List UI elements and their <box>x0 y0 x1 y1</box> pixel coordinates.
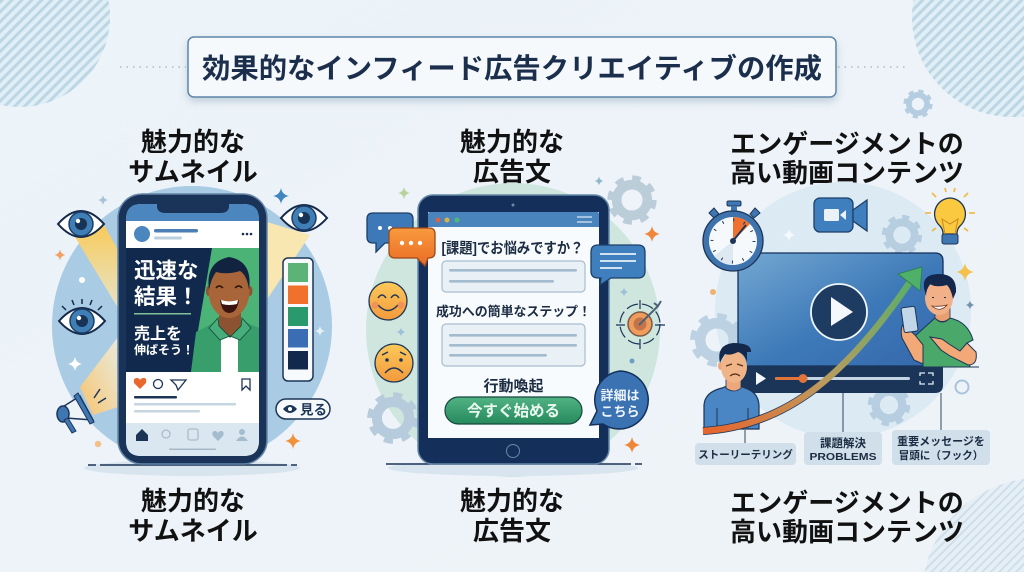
ad creative <box>126 248 259 372</box>
icon: video camera <box>814 198 867 232</box>
icon: megaphone <box>57 389 106 433</box>
sparkles <box>54 188 325 449</box>
label: hook message: 冒頭に（フック） <box>899 449 983 462</box>
label: storytelling <box>695 443 796 465</box>
problem headline: [課題]でお悩みですか？ <box>442 240 584 257</box>
bottom nav <box>126 423 259 456</box>
sad man <box>704 343 759 429</box>
call to action label: 行動喚起 <box>483 377 544 395</box>
post header <box>126 221 259 248</box>
tablet <box>418 195 609 464</box>
eye: middle left <box>59 299 105 334</box>
label: hook message: 重要メッセージを <box>897 434 985 448</box>
CTA button <box>445 397 582 424</box>
heading: thumbnail top: サムネイル <box>128 157 258 187</box>
video player <box>738 253 943 393</box>
callout: details: 詳細は <box>600 388 640 403</box>
label: problem solving: 課題解決 <box>820 436 866 450</box>
sad face <box>375 344 413 382</box>
player controls <box>756 372 933 385</box>
gear: top <box>885 218 919 252</box>
icon: light bulb <box>925 188 975 244</box>
heading: ad copy top: 広告文 <box>473 157 551 187</box>
gear: left <box>694 317 740 363</box>
view pill <box>276 399 330 419</box>
play button <box>811 284 867 340</box>
speech bubble: orange <box>389 228 435 266</box>
smiling man <box>191 257 259 372</box>
eye: top right <box>281 205 327 231</box>
speech bubble: blue left <box>367 213 413 252</box>
notch <box>157 204 229 213</box>
callout: details <box>590 371 648 429</box>
handheld phone <box>901 306 918 333</box>
heading: thumbnail bottom: サムネイル <box>128 516 258 546</box>
gear: bottom left <box>371 396 415 440</box>
heading: video top: 高い動画コンテンツ <box>730 158 964 188</box>
attention beams <box>75 222 310 415</box>
heading: ad copy bottom: 広告文 <box>473 516 551 546</box>
target icon <box>616 300 665 349</box>
icon: stopwatch <box>703 201 763 271</box>
gear near title <box>906 92 930 116</box>
label: storytelling: ストーリーテリング <box>698 448 793 461</box>
panel: ad copy illustration <box>366 176 665 477</box>
gear: top right <box>611 179 653 221</box>
color palette <box>283 258 313 381</box>
heading: thumbnail top: 魅力的な <box>141 127 245 157</box>
heading: video bottom: 高い動画コンテンツ <box>730 517 964 547</box>
heading: video bottom: エンゲージメントの <box>730 488 964 518</box>
ad creative: 迅速な <box>134 259 199 283</box>
gear: bottom <box>871 387 907 423</box>
text box 2 <box>442 324 585 366</box>
growth arrow <box>703 267 922 431</box>
eye: top left <box>58 211 104 237</box>
panel: thumbnail illustration <box>52 186 332 476</box>
heading: thumbnail bottom: 魅力的な <box>141 486 245 516</box>
text box 1 <box>442 261 585 292</box>
label: problem solving: PROBLEMS <box>810 451 876 463</box>
sparkles <box>396 176 660 453</box>
title banner <box>120 37 905 97</box>
panel: video illustration <box>694 182 990 465</box>
heading: ad copy bottom: 魅力的な <box>460 486 564 516</box>
heading: video top: エンゲージメントの <box>730 129 964 159</box>
heading: ad copy top: 魅力的な <box>460 127 564 157</box>
ring and sparkles <box>710 229 974 394</box>
ad creative: 伸ばそう！ <box>134 342 194 357</box>
steps headline: 成功への簡単なステップ！ <box>436 304 591 319</box>
connector lines <box>745 393 941 443</box>
decorative stripe circle: top left <box>0 0 110 107</box>
smiley face <box>369 282 407 320</box>
ad creative: 結果！ <box>134 285 199 309</box>
label: hook message <box>892 430 990 465</box>
ad creative: 売上を <box>134 325 182 343</box>
post actions <box>134 378 250 412</box>
decorative stripe circle: bottom right <box>924 479 1024 572</box>
label: problem solving <box>804 432 882 465</box>
happy man <box>901 274 979 367</box>
speech bubble: blue right <box>591 245 645 285</box>
view pill: 見る <box>300 402 327 418</box>
browser bar <box>428 212 599 227</box>
CTA button: 今すぐ始める <box>467 401 560 420</box>
callout: details: こちら <box>600 404 640 419</box>
phone <box>118 194 267 464</box>
decorative stripe circle: top right <box>912 0 1024 117</box>
title banner: 効果的なインフィード広告クリエイティブの作成 <box>202 52 822 84</box>
